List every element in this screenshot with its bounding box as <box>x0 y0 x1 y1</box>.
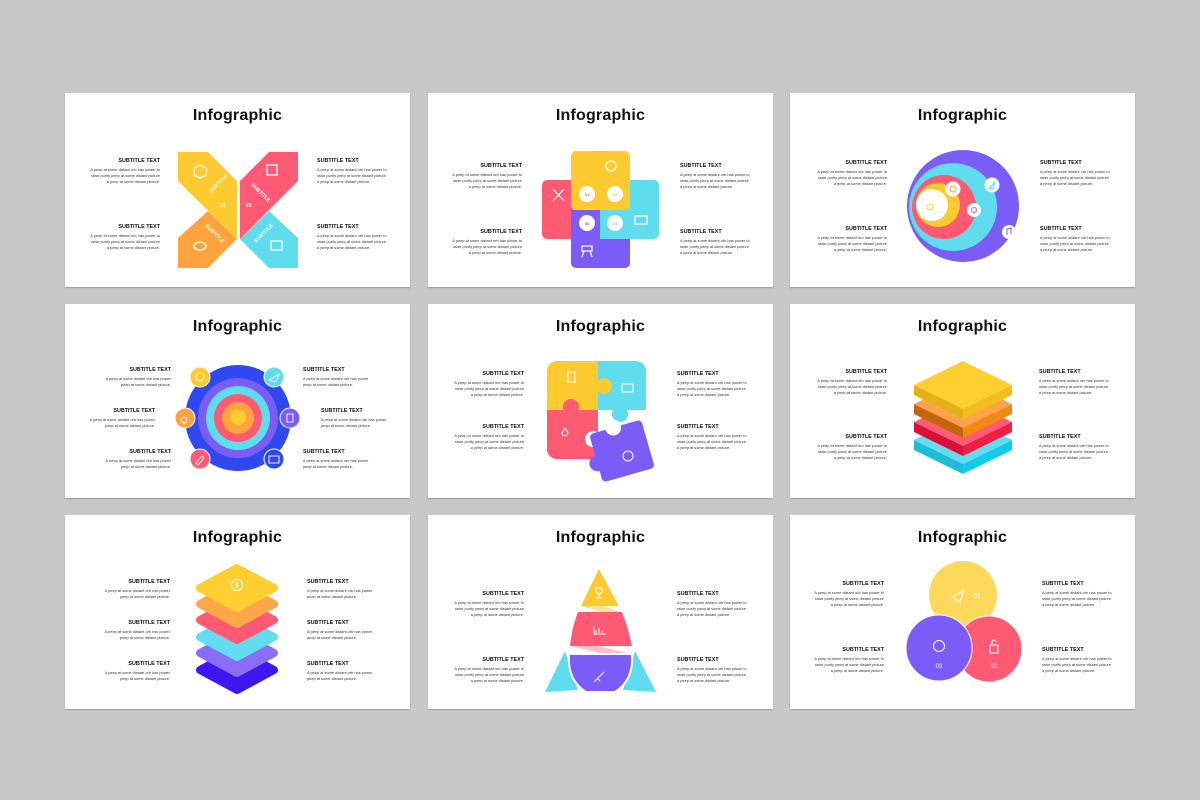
text block left top <box>454 371 524 397</box>
venn chart <box>790 515 1135 709</box>
text block right top: raise purify peep at some distant picture <box>1042 596 1111 601</box>
text block right 2: peep at some distant picture. <box>307 635 357 640</box>
text block left bottom: a peep at some distant picture. <box>834 247 887 252</box>
text block right 2: SUBTITLE TEXT <box>307 620 349 626</box>
text block left top: a peep at some distant picture. <box>471 392 524 397</box>
text block right bottom: raise purify peep at some distant picture <box>677 439 746 444</box>
text block left top: a peep at some distant picture. <box>834 181 887 186</box>
text block right bottom <box>677 657 787 685</box>
text block left bottom: SUBTITLE TEXT <box>845 226 887 232</box>
text block left 3: peep at some distant picture. <box>121 464 171 469</box>
text block right bottom <box>680 229 750 255</box>
text block left top: a peep at some distant picture. <box>831 602 884 607</box>
slide 8: rocket <box>428 515 773 709</box>
text block right top: raise purify peep at some distant picture <box>317 173 386 178</box>
text block right top <box>1040 160 1110 186</box>
text block right bottom: a peep at some distant picture. <box>677 445 730 450</box>
text block left bottom: A peep at some distant orb has power to <box>90 232 160 238</box>
text block left top: A peep at some distant orb has power to <box>814 590 884 594</box>
text block right bottom: SUBTITLE TEXT <box>677 657 719 663</box>
X chart: SUBTITLE <box>208 172 230 194</box>
text block right 2 <box>321 408 386 428</box>
text block left top <box>774 581 884 609</box>
text block right bottom: a peep at some distant picture. <box>317 245 370 250</box>
text block right bottom: A peep at some distant orb has power to <box>677 666 747 670</box>
text block left bottom: A peep at some distant orb has power to <box>814 656 884 660</box>
text block left top: A peep at some distant orb has power to <box>817 378 887 382</box>
text block right bottom: raise purify peep at some distant picture <box>1040 241 1109 246</box>
text block left 3 <box>104 661 170 681</box>
text block right top <box>317 158 387 184</box>
text block right top: A peep at some distant orb has power to <box>677 380 747 384</box>
text block left 3: A peep at some distant orb has power <box>105 670 170 674</box>
text block left 1: SUBTITLE TEXT <box>129 367 171 373</box>
text block left top: SUBTITLE TEXT <box>845 369 887 375</box>
text block right top: A peep at some distant orb has power to <box>1040 168 1110 174</box>
text block left 2: peep at some distant picture. <box>120 635 170 640</box>
text block left bottom: raise purify peep at some distant picture <box>453 244 522 249</box>
text block left top: raise purify peep at some distant picture <box>455 386 524 391</box>
text block right bottom: raise purify peep at some distant picture <box>1039 449 1108 454</box>
text block right 3 <box>303 449 368 469</box>
title: Infographic <box>556 529 645 546</box>
text block right top: A peep at some distant orb has power to <box>317 166 387 172</box>
text block right top: raise purify peep at some distant picture <box>680 178 749 183</box>
text block right 3: peep at some distant picture. <box>303 464 353 469</box>
text block left bottom: a peep at some distant picture. <box>831 668 884 673</box>
title: Infographic <box>193 107 282 124</box>
title: Infographic <box>918 107 1007 124</box>
rocket chart <box>428 515 773 709</box>
text block right top <box>677 591 787 619</box>
diamonds chart <box>196 564 278 694</box>
text block left bottom: SUBTITLE TEXT <box>842 647 884 653</box>
circles chart <box>907 150 1019 262</box>
X chart: #1 <box>220 203 226 209</box>
text block right 2 <box>307 620 372 640</box>
target chart <box>176 365 300 471</box>
text block right bottom: raise purify peep at some distant picture <box>677 672 746 677</box>
text block right bottom: a peep at some distant picture. <box>1039 455 1092 460</box>
text block left top: A peep at some distant orb has power to <box>454 380 524 384</box>
text block right bottom <box>317 224 387 250</box>
text block right bottom <box>1039 434 1109 460</box>
text block right top: A peep at some distant orb has power to <box>680 172 750 176</box>
text block left 3 <box>106 449 171 469</box>
text block left 2: SUBTITLE TEXT <box>128 620 170 626</box>
text block left top: raise purify peep at some distant picture <box>818 384 887 389</box>
text block left bottom: A peep at some distant orb has power to <box>817 442 887 448</box>
text block right top: SUBTITLE TEXT <box>1042 581 1084 587</box>
text block right 3: A peep at some distant orb has power <box>303 458 368 462</box>
text block left 1: SUBTITLE TEXT <box>128 579 170 585</box>
text block right bottom: A peep at some distant orb has power to <box>677 432 747 438</box>
text block left top <box>817 160 887 186</box>
X chart: #2 <box>246 203 252 209</box>
text block left bottom: A peep at some distant orb has power to <box>817 234 887 240</box>
text block right top: A peep at some distant orb has power to <box>1042 590 1112 594</box>
text block right bottom: raise purify peep at some distant picture <box>1042 662 1111 667</box>
text block right top: SUBTITLE TEXT <box>677 591 719 597</box>
text block left top <box>817 369 887 395</box>
text block left top: SUBTITLE TEXT <box>482 591 524 597</box>
text block right top: raise purify peep at some distant picture <box>1040 175 1109 180</box>
text block left top: SUBTITLE TEXT <box>842 581 884 587</box>
text block left top <box>452 163 522 189</box>
text block left top: a peep at some distant picture. <box>469 184 522 189</box>
text block right 1: A peep at some distant orb has power <box>303 376 368 380</box>
text block left 2: SUBTITLE TEXT <box>113 408 155 414</box>
text block right 3: SUBTITLE TEXT <box>307 661 349 667</box>
text block right bottom: SUBTITLE TEXT <box>1039 434 1081 440</box>
text block right 2: A peep at some distant orb has power <box>307 628 372 634</box>
text block left bottom: SUBTITLE TEXT <box>845 434 887 440</box>
text block left bottom: A peep at some distant orb has power to <box>452 238 522 242</box>
text block left top: a peep at some distant picture. <box>107 179 160 184</box>
text block left top: SUBTITLE TEXT <box>118 158 160 164</box>
text block right bottom: SUBTITLE TEXT <box>1040 226 1082 232</box>
text block right 2: SUBTITLE TEXT <box>321 408 363 414</box>
squares chart: 04 <box>585 221 590 226</box>
text block right bottom: raise purify peep at some distant picture <box>680 244 749 249</box>
title: Infographic <box>556 318 645 335</box>
text block right bottom <box>1042 647 1152 675</box>
text block right top <box>677 371 747 397</box>
squares chart: 03 <box>613 221 618 226</box>
text block left 1 <box>104 579 170 599</box>
X chart: SUBTITLE <box>253 222 275 244</box>
text block left 2 <box>104 620 170 640</box>
text block right bottom: SUBTITLE TEXT <box>317 224 359 230</box>
text block right bottom: A peep at some distant orb has power to <box>317 232 387 238</box>
text block left bottom: SUBTITLE TEXT <box>482 424 524 430</box>
text block right top: SUBTITLE TEXT <box>680 163 722 169</box>
text block right bottom <box>677 424 747 450</box>
text block left 3: A peep at some distant orb has power <box>106 458 171 462</box>
text block left 2: peep at some distant picture. <box>105 423 155 428</box>
text block left bottom: raise purify peep at some distant picture <box>455 672 524 677</box>
text block left bottom: a peep at some distant picture. <box>471 678 524 683</box>
text block left top: A peep at some distant orb has power to <box>454 600 524 604</box>
text block right 1: SUBTITLE TEXT <box>303 367 345 373</box>
title: Infographic <box>918 529 1007 546</box>
text block left bottom <box>90 224 160 250</box>
X chart: SUBTITLE <box>250 182 272 204</box>
squares chart <box>542 151 659 268</box>
text block left bottom: SUBTITLE TEXT <box>118 224 160 230</box>
text block right top <box>1042 581 1152 609</box>
text block right top: SUBTITLE TEXT <box>1040 160 1082 166</box>
X chart <box>178 152 298 268</box>
text block left top: SUBTITLE TEXT <box>482 371 524 377</box>
text block right top: a peep at some distant picture. <box>677 392 730 397</box>
text block right bottom: a peep at some distant picture. <box>680 250 733 255</box>
title: Infographic <box>556 107 645 124</box>
layers chart <box>914 361 1012 474</box>
text block left bottom: a peep at some distant picture. <box>834 455 887 460</box>
text block right bottom: A peep at some distant orb has power to <box>1042 656 1112 660</box>
text block left 1: A peep at some distant orb has power <box>106 376 171 380</box>
text block right top: a peep at some distant picture. <box>677 612 730 617</box>
text block left bottom <box>817 226 887 252</box>
text block right bottom: A peep at some distant orb has power to <box>1040 234 1110 240</box>
text block left top: a peep at some distant picture. <box>834 390 887 395</box>
text block right 1: SUBTITLE TEXT <box>307 579 349 585</box>
text block right top: SUBTITLE TEXT <box>677 371 719 377</box>
text block right top <box>1039 369 1109 395</box>
text block left 1 <box>106 367 171 387</box>
text block left bottom <box>774 647 884 675</box>
text block right bottom: a peep at some distant picture. <box>677 678 730 683</box>
text block right bottom: A peep at some distant orb has power to <box>1039 442 1109 448</box>
text block left 1: peep at some distant picture. <box>121 382 171 387</box>
text block right top: A peep at some distant orb has power to <box>1039 378 1109 382</box>
text block right bottom <box>1040 226 1110 252</box>
text block left top: raise purify peep at some distant picture <box>818 175 887 180</box>
text block left top: SUBTITLE TEXT <box>480 163 522 169</box>
text block left 1: A peep at some distant orb has power <box>105 588 170 592</box>
text block right top: raise purify peep at some distant picture <box>677 606 746 611</box>
slide 1: X shape <box>65 93 410 287</box>
slide 2: pinwheel squares <box>428 93 773 287</box>
slide 5: puzzle <box>428 304 773 498</box>
venn chart: 01 <box>974 594 981 600</box>
text block right 3 <box>307 661 372 681</box>
text block left top: a peep at some distant picture. <box>471 612 524 617</box>
title: Infographic <box>193 529 282 546</box>
text block left bottom: a peep at some distant picture. <box>469 250 522 255</box>
puzzle chart <box>547 361 654 482</box>
text block left top: A peep at some distant orb has power to <box>452 172 522 176</box>
slide 6: isometric layers <box>790 304 1135 498</box>
text block left bottom: raise purify peep at some distant picture <box>91 239 160 244</box>
text block right 2: peep at some distant picture. <box>321 423 371 428</box>
text block right top: SUBTITLE TEXT <box>1039 369 1081 375</box>
text block left top <box>454 591 524 617</box>
text block left top: raise purify peep at some distant picture <box>453 178 522 183</box>
text block right bottom: raise purify peep at some distant picture <box>317 239 386 244</box>
slide 9: venn circles <box>790 515 1135 709</box>
text block left bottom <box>817 434 887 460</box>
text block right 2: A peep at some distant orb has power <box>321 416 386 422</box>
text block left top: A peep at some distant orb has power to <box>817 168 887 174</box>
text block left bottom: a peep at some distant picture. <box>471 445 524 450</box>
text block left bottom: A peep at some distant orb has power to <box>454 666 524 670</box>
text block left 2: A peep at some distant orb has power <box>90 416 155 422</box>
text block right top: a peep at some distant picture. <box>1042 602 1095 607</box>
text block left 3: peep at some distant picture. <box>120 676 170 681</box>
slide 3: concentric offset circles <box>790 93 1135 287</box>
text block right top: raise purify peep at some distant picture <box>1039 384 1108 389</box>
text block left top: raise purify peep at some distant picture <box>91 173 160 178</box>
text block right 1 <box>307 579 372 599</box>
text block left 1: peep at some distant picture. <box>120 594 170 599</box>
text block left bottom: raise purify peep at some distant picture <box>818 241 887 246</box>
slide 7: stacked rounded diamonds <box>65 515 410 709</box>
slide 4: target with 6 icons <box>65 304 410 498</box>
text block left top: SUBTITLE TEXT <box>845 160 887 166</box>
squares chart: 02 <box>613 192 618 197</box>
text block right top: SUBTITLE TEXT <box>317 158 359 164</box>
text block right top: a peep at some distant picture. <box>1039 390 1092 395</box>
text block left 3: SUBTITLE TEXT <box>128 661 170 667</box>
text block right top: A peep at some distant orb has power to <box>677 600 747 604</box>
text block left top: raise purify peep at some distant picture <box>455 606 524 611</box>
text block left bottom: SUBTITLE TEXT <box>482 657 524 663</box>
text block left bottom: a peep at some distant picture. <box>107 245 160 250</box>
text block left bottom <box>414 657 524 685</box>
text block right bottom: SUBTITLE TEXT <box>1042 647 1084 653</box>
text block left bottom: SUBTITLE TEXT <box>480 229 522 235</box>
text block right bottom: SUBTITLE TEXT <box>680 229 722 235</box>
text block left bottom: raise purify peep at some distant picture <box>815 662 884 667</box>
text block left bottom <box>454 424 524 450</box>
text block left 2: A peep at some distant orb has power <box>105 628 170 634</box>
text block right top: a peep at some distant picture. <box>317 179 370 184</box>
X chart: SUBTITLE <box>204 223 226 245</box>
text block right top: raise purify peep at some distant picture <box>677 386 746 391</box>
text block right 3: peep at some distant picture. <box>307 676 357 681</box>
text block right 1: peep at some distant picture. <box>303 382 353 387</box>
title: Infographic <box>193 318 282 335</box>
text block left top <box>90 158 160 184</box>
text block right 1: peep at some distant picture. <box>307 594 357 599</box>
text block right top <box>680 163 750 189</box>
text block right top: a peep at some distant picture. <box>1040 181 1093 186</box>
text block right bottom: a peep at some distant picture. <box>1042 668 1095 673</box>
text block left top: A peep at some distant orb has power to <box>90 166 160 172</box>
text block left top: raise purify peep at some distant picture <box>815 596 884 601</box>
text block right 3: SUBTITLE TEXT <box>303 449 345 455</box>
text block right bottom: SUBTITLE TEXT <box>677 424 719 430</box>
text block right 1 <box>303 367 368 387</box>
text block left bottom: A peep at some distant orb has power to <box>454 432 524 438</box>
text block right 1: A peep at some distant orb has power <box>307 588 372 592</box>
text block left bottom <box>452 229 522 255</box>
text block left bottom: raise purify peep at some distant picture <box>818 449 887 454</box>
text block right bottom: A peep at some distant orb has power to <box>680 238 750 242</box>
text block left bottom: raise purify peep at some distant picture <box>455 439 524 444</box>
text block right bottom: a peep at some distant picture. <box>1040 247 1093 252</box>
title: Infographic <box>918 318 1007 335</box>
text block left 3: SUBTITLE TEXT <box>129 449 171 455</box>
venn chart: 02 <box>991 664 998 670</box>
text block left 2 <box>90 408 155 428</box>
text block right 3: A peep at some distant orb has power <box>307 670 372 674</box>
squares chart: 01 <box>585 192 590 197</box>
icon: cloud download <box>232 580 242 590</box>
text block right top: a peep at some distant picture. <box>680 184 733 189</box>
venn chart: 03 <box>936 664 943 670</box>
